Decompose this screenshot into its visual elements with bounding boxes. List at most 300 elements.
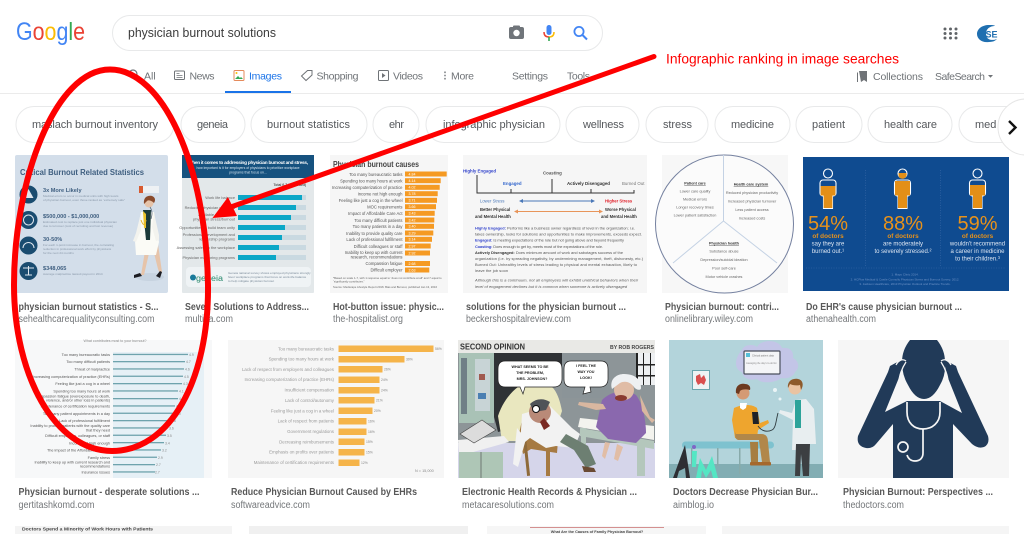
- stress arrows: Worse Physical: [605, 207, 636, 212]
- segment: patient care: Lower patient satisfaction: [674, 214, 716, 218]
- yellow bars: [338, 346, 434, 466]
- bar values: 4.02: [408, 186, 416, 190]
- bar values: 24%: [381, 388, 388, 392]
- bar labels: [242, 346, 335, 465]
- bar labels: Inability to provide quality care: [346, 231, 403, 236]
- bar labels: research, recommendations: [351, 254, 402, 260]
- continuum labels: [463, 168, 645, 186]
- definitions text: organization (i.e. by spreading negativity, by undermining management, theft, dishonesty, etc.): [475, 256, 644, 261]
- row values: 3.6: [169, 426, 174, 430]
- bar labels: MOC requirements: [367, 204, 402, 210]
- stethoscope: [898, 402, 940, 461]
- statistic: 3x more likely: [20, 186, 125, 204]
- row labels: Spending too many hours at work: [53, 390, 110, 394]
- segment: patient care: Longer recovery times: [676, 206, 714, 210]
- bar labels: Feeling like just a cog in a wheel: [271, 408, 334, 414]
- chart footnote: “significantly contributes.”: [333, 280, 365, 284]
- icon: apps grid: [944, 28, 958, 40]
- icon: camera: [509, 26, 524, 39]
- statistic: replacement cost: due to turnover (cost of recruiting and lost revenue): [43, 224, 113, 228]
- definitions text: Coasting: Does enough to get by, meets most of the expectations of the role.: [475, 244, 603, 249]
- segment: physician health: [700, 242, 748, 279]
- tab: more: More: [451, 70, 474, 82]
- stat column: 54 percent: 54%: [808, 213, 848, 235]
- banner heading: programs that focus on...: [229, 170, 267, 174]
- chip: medicine: medicine: [731, 119, 774, 131]
- bar values: 2.92: [408, 251, 416, 255]
- safesearch link: SafeSearch: [935, 71, 985, 83]
- wall cabinet: [459, 353, 494, 423]
- statistic: malpractice award: [20, 262, 103, 280]
- patient in purple dress: [578, 374, 655, 461]
- annotation: callout label: Infographic ranking in image searches: [666, 50, 899, 66]
- footnotes: [851, 272, 959, 286]
- tab: images, selected: [225, 70, 291, 93]
- bar labels: Government regulations: [287, 429, 335, 434]
- thumbnail title: electronic health records: Electronic Health Records & Physician ...: [462, 486, 637, 498]
- bar values: 3.29: [408, 231, 416, 235]
- annotation: red arrow: [212, 56, 654, 218]
- chip: stress: stress: [663, 119, 692, 131]
- sample size note: N = 15,000: [415, 469, 434, 473]
- thumbnail title: desperate solutions: Physician burnout - desperate solutions ...: [18, 486, 200, 498]
- cartoon header: SECOND OPINION: [460, 342, 525, 352]
- genelia callout: favor workplace programs that focus on work-life balance: [228, 275, 307, 279]
- statistic: 30-50 percent: 30-50%: [43, 237, 62, 243]
- row labels: [30, 353, 111, 474]
- examination table: [578, 418, 654, 476]
- statistic: replacement cost: Estimated cost to replace just one individual physician: [43, 220, 117, 224]
- chip: ehr: [373, 106, 419, 142]
- chip: medicine: [715, 106, 790, 142]
- footnotes: 2. HCPlus Medical & Castle Connolly Physician Stress and Burnout Survey, 2012.: [851, 278, 959, 282]
- wall picture: [692, 370, 710, 390]
- chip: infographic physician: infographic physician: [443, 119, 545, 131]
- thumbnail: engagement continuum: [463, 155, 647, 293]
- chart title: Physician burnout causes: [333, 160, 419, 169]
- stress arrows: Lower Stress: [480, 198, 504, 204]
- definitions text: takes ownership, looks for solutions and opportunities to make improvements, exceeds expect.: [475, 232, 642, 236]
- stat column: 59 percent: wouldn't recommend: [949, 242, 1005, 248]
- statistic: 30-50 percent: For each 1-point increase in burnout, the correlating: [43, 243, 114, 247]
- row labels: Family stress: [88, 456, 110, 460]
- chart legend: Total 6-7 (important): [273, 183, 306, 187]
- stat column: 88 percent: to severely stressed.²: [874, 249, 932, 255]
- bar values: 3.14: [408, 238, 416, 242]
- icon: account avatar: SE: [986, 30, 998, 40]
- row labels: Lack of professional fulfillment: [59, 419, 111, 423]
- speech bubble: doctor: THE PROBLEM,: [516, 371, 544, 375]
- bar values: 12%: [361, 461, 368, 465]
- third row thumbnails, cropped: [15, 526, 1009, 534]
- speech bubble: patient: I FEEL THE: [576, 364, 596, 368]
- thumbnail source: gertitashkomd: gertitashkomd.com: [18, 500, 94, 511]
- head: [902, 340, 945, 399]
- value lines: [113, 354, 188, 473]
- row labels: Maintenance of certification requirements: [41, 404, 110, 408]
- row values: 2.9: [158, 456, 163, 460]
- chip: geneia: [181, 106, 245, 142]
- stat column: 59 percent: [949, 169, 1005, 262]
- icon: search: [574, 27, 587, 40]
- row labels: recommendations: [80, 464, 110, 468]
- speech bubble: patient: [564, 361, 608, 394]
- bar labels: Too many difficult patients: [354, 218, 402, 223]
- row values: 3.5: [167, 434, 172, 438]
- bar labels: Feeling like just a cog in the wheel: [339, 198, 403, 203]
- definitions text: leave the job soon: [475, 268, 508, 273]
- bar labels: Impact of Affordable Care Act: [348, 211, 403, 216]
- row values: 4.3: [183, 382, 188, 386]
- row labels: Inability to keep up with current research and: [34, 460, 110, 464]
- bar values: 2.63: [408, 268, 416, 272]
- bar values: 21%: [376, 398, 383, 402]
- bar labels: Too many bureaucratic tasks: [349, 172, 402, 177]
- continuum labels: Engaged: [503, 181, 522, 186]
- cropped thumbnail: light panel: [722, 526, 1009, 534]
- segment: health care system: Increased costs: [739, 216, 765, 220]
- stress arrows: Better Physical: [480, 207, 510, 212]
- row labels: Inability to provide patients with the quality care: [30, 424, 110, 428]
- tab: videos: Videos: [393, 70, 423, 82]
- statistic: replacement cost: $500,000 - $1,000,000: [43, 214, 99, 220]
- bar labels: Spending too many hours at work: [340, 178, 403, 184]
- statistic: replacement cost: [20, 211, 117, 229]
- thumbnail: pie diagram of burnout consequences: [656, 155, 794, 293]
- footnotes: 1. Mayo Clinic 2014.: [891, 272, 919, 276]
- row labels: Income not high enough: [69, 442, 110, 446]
- thumbnail source: wiley: onlinelibrary.wiley.com: [665, 314, 753, 325]
- row values: 2.7: [156, 463, 161, 467]
- chart footnote: *Based on scale 1-7, with 1 response equal to “does not contribute at all” and 7 equal to: [333, 276, 442, 280]
- segment: health care system: [726, 182, 778, 220]
- annotation: red ellipse around infographic results: [14, 70, 208, 451]
- segment: health care system: Health care system: [734, 182, 769, 186]
- banner heading: When it comes to addressing physician burnout and stress,: [188, 160, 308, 165]
- bar labels: Difficult employer: [370, 268, 403, 272]
- thumbnail: seven solutions chart: [177, 155, 314, 293]
- stat column: 54 percent: [808, 169, 848, 255]
- thought cloud with tablet: [736, 341, 798, 382]
- chart footnote: Source: Medscape Lifestyle Report 2016: Bias and Burnout, published Jan 13, 2016: [333, 285, 437, 289]
- bar values: 16%: [368, 420, 375, 424]
- row values: 4.0: [176, 412, 181, 416]
- row values: 4.1: [179, 397, 184, 401]
- tab: all: [129, 70, 156, 82]
- definitions text: [474, 226, 644, 289]
- thumbnail title: seven solutions: Seven Solutions to Address...: [185, 301, 309, 313]
- cropped thumbnail: causes of family physician burnout: [487, 526, 706, 534]
- bar values: 15%: [366, 450, 373, 454]
- thumbnail source: athenahealth: athenahealth.com: [806, 314, 876, 325]
- tab: images, selected: Images: [249, 70, 282, 82]
- definitions text: Actively Disengaged: Does minimum amount of work and sabotages success of the: [475, 250, 623, 255]
- bar labels: Increasing computerization of practice (EHRs): [244, 377, 335, 382]
- footnotes: 3. Jackson Healthcare, 2013 Physician Outlook and Practice Trends.: [859, 282, 951, 286]
- genelia callout: Geneia national survey shows employed physicians strongly: [228, 271, 311, 275]
- statistic: 30-50 percent: for the next 24 months: [43, 251, 74, 255]
- statistic: malpractice award: Average malpractice lawsuit payout in 2014: [43, 272, 103, 276]
- definitions text: Highly Engaged: Performs like a business owner regardless of level in the organization; i.e.: [475, 226, 635, 230]
- bar values: 3.66: [408, 205, 416, 209]
- stat column: 54 percent: of doctors: [812, 233, 844, 240]
- statistic: 3x more likely: 3x More Likely: [43, 188, 82, 194]
- bar labels: Lack of professional fulfillment: [346, 237, 403, 242]
- counter with newspaper: [458, 420, 509, 478]
- stat column: 59 percent: a career in medicine: [950, 249, 1005, 255]
- tab: tools: Tools: [567, 70, 590, 82]
- row labels: Too many patient appointments in a day: [43, 412, 110, 416]
- chart footnote: [333, 276, 442, 289]
- chip: patient: [796, 106, 862, 142]
- bar values: [361, 347, 442, 465]
- segment: health care system: Less patient access: [735, 208, 769, 212]
- bar values: 3.71: [408, 199, 416, 203]
- tab: all: All: [144, 70, 156, 82]
- tab: videos: [378, 70, 423, 82]
- bar values: 3.43: [408, 212, 416, 216]
- banner heading: [182, 155, 314, 178]
- row values: 4.6: [185, 368, 190, 372]
- stat column: 88 percent: of doctors: [887, 233, 919, 240]
- segment: physician health: Physician health: [709, 242, 740, 246]
- genelia callout: geneia: [196, 274, 224, 283]
- speech bubble: doctor: [498, 361, 562, 394]
- row labels: Compassion fatigue (overexposure to death,: [35, 394, 110, 398]
- window: [636, 353, 655, 385]
- stat column: 59 percent: 59%: [957, 213, 998, 235]
- AiM logo: [673, 445, 718, 478]
- stat column: 88 percent: are moderately: [883, 242, 923, 248]
- bar values: 2.97: [408, 244, 416, 248]
- bar labels: Lack of respect from patients: [278, 418, 335, 424]
- segment: physician health: Substance abuse: [709, 250, 739, 254]
- row labels: Too many bureaucratic tasks: [62, 353, 110, 357]
- row labels: Increasing computerization of practice (EHRs): [33, 375, 111, 379]
- thumbnail source: sehealthcarequalityconsulting: sehealthcarequalityconsulting.com: [18, 314, 154, 325]
- horizontal bar chart: Available services for: [198, 212, 236, 217]
- tab: news: News: [190, 70, 214, 82]
- thumbnail: critical burnout statistics: [15, 155, 168, 293]
- orange bars: [405, 172, 447, 272]
- chip: ehr: ehr: [389, 119, 404, 131]
- cropped thumbnail: causes of family physician burnout: What Are the Causes of Family Physician Burnout?: [551, 530, 644, 534]
- bar labels: Maintenance of certification requirements: [254, 460, 335, 465]
- banner heading: how important is it for employers of physicians to prioritize workplace: [196, 166, 300, 170]
- chip: wellness: wellness: [582, 119, 624, 131]
- tab: settings: Settings: [512, 70, 548, 82]
- thumbnail title: physician burnout perspectives: Physician Burnout: Perspectives ...: [843, 486, 993, 498]
- row values: 3.2: [162, 448, 167, 452]
- search query: physician burnout solutions: [128, 25, 276, 40]
- horizontal bar chart: leadership programs: [200, 236, 235, 242]
- pie dividers: [673, 155, 777, 263]
- horizontal bar chart: Professional development and: [183, 232, 235, 237]
- segment: physician health: Motor vehicle crashes: [706, 275, 743, 279]
- row labels: violence, and/or other loss in patients): [46, 398, 111, 402]
- google logo: Google: [16, 18, 85, 46]
- stat column: 59 percent: of doctors: [962, 233, 994, 240]
- bar labels: Increasing computerization of practice: [332, 185, 403, 190]
- statistic: 3x more likely: Medical errors to occur in medical units with high levels: [43, 194, 119, 198]
- bar labels: Emphasis on profits over patients: [269, 450, 335, 454]
- bar values: 15%: [366, 440, 373, 444]
- bar labels: Decreasing reimbursements: [279, 440, 335, 444]
- thumbnail source: softwareadvice: softwareadvice.com: [231, 500, 310, 511]
- statistic: malpractice award: $348,065: [43, 266, 66, 272]
- bar labels: Lack of control/autonomy: [285, 398, 335, 403]
- segment: health care system: Increased physician turnover: [728, 200, 777, 204]
- bar values: 3.40: [408, 225, 416, 229]
- stress arrows: and Mental Health: [601, 214, 637, 219]
- bar values: 16%: [368, 430, 375, 434]
- chip: health care: [868, 106, 952, 142]
- thumbnail source: multiva: multiva.com: [185, 314, 233, 325]
- stat column: 54 percent: say they are: [812, 242, 845, 248]
- thumbnail title: EHR cause burnout: Do EHR's cause physician burnout ...: [806, 301, 962, 313]
- stat column: 88 percent: [874, 169, 932, 255]
- row labels: Too many difficult patients: [66, 360, 110, 364]
- examination bench: [682, 442, 774, 474]
- stat column: 59 percent: to their children.³: [955, 256, 1000, 262]
- horizontal bar chart: Opportunities to build team unity: [179, 225, 235, 230]
- chart title: What contributes most to your burnout?: [84, 339, 146, 343]
- definitions text: level of engagement declines but it is common when someone is actively disengaged: [475, 284, 628, 289]
- continuum labels: Highly Engaged: [463, 168, 496, 174]
- definitions text: Engaged: Is meeting expectations of the role but not going above and beyond frequently: [475, 238, 624, 243]
- thumbnail title: solutions for physician burnout: solutions for the physician burnout ...: [466, 301, 626, 313]
- continuum axis: [477, 175, 634, 193]
- bar values: 4.84: [408, 172, 416, 176]
- stress arrows: Higher Stress: [605, 198, 633, 204]
- thought cloud with tablet: managing the day's to-do list: [746, 362, 777, 365]
- cropped thumbnail: minority of work hours: Doctors Spend a Minority of Work Hours with Patients: [22, 526, 153, 532]
- tab: news: [174, 70, 214, 82]
- segment: physician health: Poor self-care: [712, 266, 736, 270]
- genelia callout: [186, 267, 311, 287]
- definitions text: Although this is a continuum, not all employees will exhibit unethical behaviors when their: [474, 278, 639, 282]
- thumbnail: physician burnout causes chart: [330, 155, 448, 293]
- related search chips: [16, 99, 1024, 155]
- thumbnail title: physician burnout contributors: Physician burnout: contri...: [665, 301, 779, 313]
- bar labels: Inability to keep up with current: [345, 250, 403, 255]
- genelia callout: to help mitigate physician burnout: [228, 279, 274, 283]
- stat column: 54 percent: burned out.¹: [812, 249, 844, 255]
- row labels: Difficult employers, colleagues, or staff: [45, 434, 111, 438]
- continuum labels: Actively Disengaged: [567, 181, 610, 186]
- next arrow button: [998, 99, 1024, 155]
- illustration: walking doctor: [133, 186, 164, 281]
- stat column: 88 percent: 88%: [883, 213, 923, 235]
- segment: patient care: Medical errors: [683, 198, 707, 202]
- statistic: 30-50 percent: reduction in professional work effort by physicians: [43, 247, 112, 251]
- thumbnail heading: Critical Burnout Related Statistics: [20, 168, 145, 177]
- thumbnail source: aimblog: aimblog.io: [673, 500, 714, 511]
- row labels: that they need: [86, 428, 110, 432]
- bar values: 24%: [381, 378, 388, 382]
- row values: 4.0: [176, 404, 181, 408]
- speech bubble: doctor: WHAT SEEMS TO BE: [512, 365, 549, 369]
- stress arrows: [475, 198, 637, 219]
- row values: 4.5: [184, 375, 189, 379]
- chip: stress: [646, 106, 708, 142]
- statistic: 3x more likely: of physician burnout, even those ranked as “extremely safe”: [43, 198, 125, 202]
- bar values: 39%: [406, 358, 413, 362]
- chip: wellness: [566, 106, 639, 142]
- silhouette body and arms: [858, 359, 988, 478]
- thumbnail: lollipop chart of burnout causes: [15, 339, 212, 478]
- cropped thumbnail: minority of work hours: [15, 526, 232, 534]
- bar values: 20%: [374, 409, 381, 413]
- bar values: 56%: [435, 347, 442, 351]
- thumbnail source: metacaresolutions: metacaresolutions.com: [462, 500, 554, 511]
- chip: patient: patient: [812, 119, 845, 131]
- segment: patient care: [674, 182, 716, 218]
- row labels: Insurance issues: [82, 470, 110, 474]
- continuum labels: Burned Out: [622, 181, 645, 186]
- bar labels: Compassion fatigue: [365, 261, 403, 266]
- blood pressure cuff tube: [758, 413, 778, 431]
- horizontal bar chart: physician stress/burnout: [193, 216, 236, 222]
- thumbnail title: physician burnout statistics: physician burnout statistics - S...: [18, 301, 159, 313]
- thought cloud with tablet: Clinical patient data: [752, 354, 774, 358]
- chip: health care: health care: [884, 119, 937, 131]
- row values: [155, 353, 194, 474]
- chip: med: med: [975, 119, 996, 131]
- cartoon header: [458, 340, 655, 353]
- horizontal bar chart: [177, 195, 306, 260]
- row values: 4.7: [186, 360, 191, 364]
- speech bubble: patient: WAY YOU: [578, 370, 595, 374]
- thumbnail: burned out doctor silhouette: [838, 340, 1009, 478]
- row labels: The impact of the Affordable Care Act: [47, 448, 111, 452]
- bar labels: Spending too many hours at work: [269, 356, 335, 362]
- thumbnail source: the-hospitalist: the-hospitalist.org: [333, 314, 403, 325]
- speech bubble: doctor: MRS. JOHNSON?: [517, 377, 548, 381]
- seated patient: [732, 384, 771, 466]
- slumped doctor on chair: [513, 399, 596, 476]
- navigation tabs: [129, 70, 993, 93]
- header: logo and search bar: [16, 16, 998, 50]
- thumbnail: burnout causes yellow bar chart: [228, 340, 444, 478]
- row values: 2.7: [155, 470, 160, 474]
- thumbnail source: thedoctors: thedoctors.com: [843, 500, 904, 511]
- row labels: Feeling like just a cog in a wheel: [55, 382, 110, 386]
- chip: med: [959, 106, 1024, 142]
- speech bubble: patient: LOOK!: [580, 376, 592, 380]
- icon: microphone: [544, 25, 554, 41]
- definitions text: Burned Out: Unhealthy levels of stress leading to physical and mental exhaustion, likely to: [475, 262, 637, 267]
- bar values: 2.68: [408, 262, 416, 266]
- bar values: [408, 172, 416, 272]
- chip: geneia: geneia: [197, 119, 229, 131]
- horizontal bar chart: Assessing safety in the workplace: [177, 245, 235, 250]
- horizontal bar chart: Work life balance: [205, 195, 235, 200]
- thumbnail title: reduce physician burnout: Reduce Physician Burnout Caused by EHRs: [231, 486, 417, 498]
- chip: burnout statistics: burnout statistics: [267, 119, 350, 131]
- icon: account avatar: [977, 25, 998, 42]
- thumbnail source: beckers: beckershospitalreview.com: [466, 314, 571, 325]
- statistic: 30-50 percent: [20, 236, 114, 255]
- row values: 4.1: [179, 390, 184, 394]
- chip: maslach burnout inventory: [16, 106, 174, 142]
- thumbnail title: doctors decrease burnout: Doctors Decrease Physician Bur...: [673, 486, 818, 498]
- bar values: 3.42: [408, 218, 416, 222]
- horizontal bar chart: Reducing physician workload: [185, 205, 235, 210]
- thumbnail: doctor visit illustration: [669, 340, 823, 478]
- standing doctor: [773, 379, 816, 476]
- bar labels: Insufficient compensation: [285, 388, 335, 392]
